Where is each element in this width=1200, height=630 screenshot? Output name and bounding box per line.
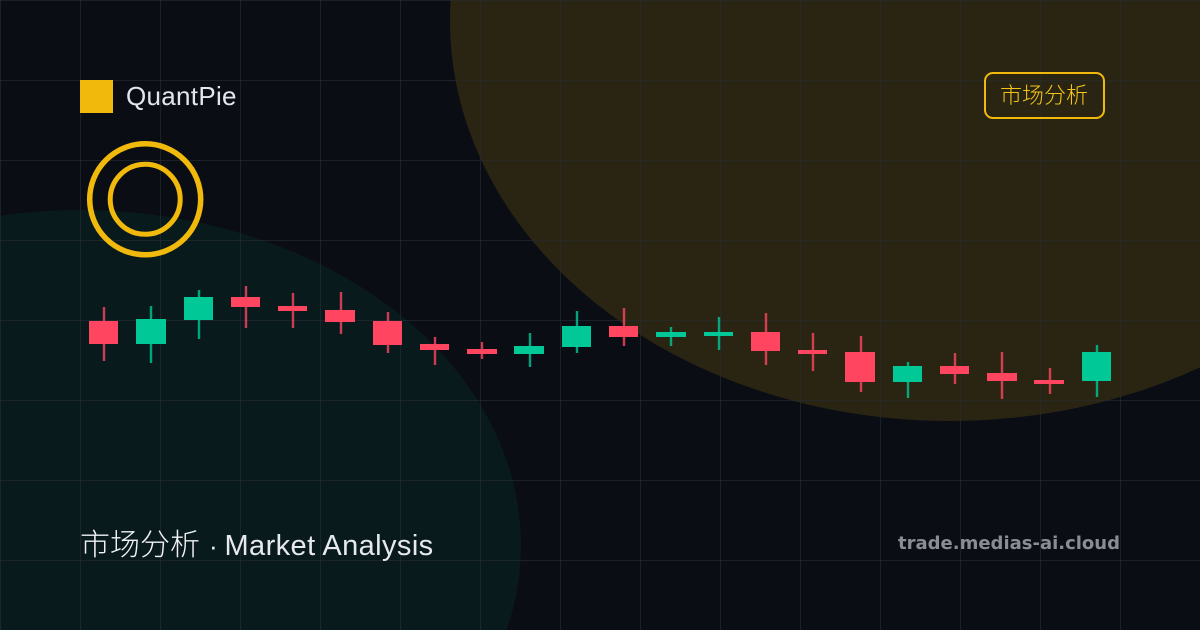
yellow background ellipse — [450, 0, 1200, 421]
brand name: QuantPie — [126, 81, 237, 111]
candlestick chart — [89, 286, 1111, 399]
tag badge — [985, 73, 1104, 118]
headline: · — [209, 531, 218, 561]
headline: 市场分析 — [80, 529, 200, 562]
logo square — [80, 80, 113, 113]
tag badge: 市场分析 — [1000, 83, 1088, 108]
ring icon — [90, 144, 201, 255]
headline: Market Analysis — [224, 530, 434, 562]
teal background ellipse — [0, 210, 521, 630]
site url: trade.medias-ai.cloud — [898, 533, 1120, 554]
